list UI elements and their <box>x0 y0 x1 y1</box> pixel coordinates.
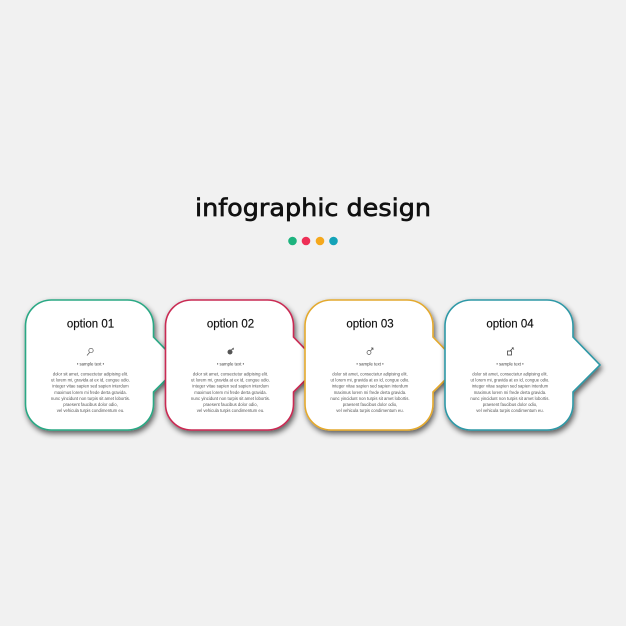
body text: maximus lorem mi frede derta gravida. <box>474 390 546 395</box>
heading: option 03 <box>346 318 394 330</box>
body text: integer vitae sapien sed sapien interdum <box>192 384 269 389</box>
panel: option 03 <box>305 300 460 430</box>
body text: maximus lorem mi frede derta gravida. <box>54 390 127 395</box>
body text <box>51 372 130 413</box>
body text: praesent faucibus dolor odio, <box>203 402 258 407</box>
panel: option 01 <box>26 300 180 430</box>
body text: integer vitae sapien sed sapien interdum <box>52 384 129 389</box>
body text: nunc yincidunt non turpis sit amet lobortis. <box>470 396 550 401</box>
body text: vel vehicula turpis condimentum eu. <box>476 408 544 413</box>
heading: option 01 <box>67 318 114 330</box>
body text: vel vehicula turpis condimentum eu. <box>336 408 404 413</box>
body text: praesent faucibus dolor odio, <box>483 402 537 407</box>
sample label: • sample text • <box>77 362 105 366</box>
body text: nunc yincidunt non turpis sit amet lobortis. <box>330 396 410 401</box>
body text: integer vitae sapien sed sapien interdum <box>332 384 409 389</box>
icon: ring <box>367 348 373 354</box>
body text: dolor sit amet, consectetur adipising elit. <box>332 372 408 376</box>
card shape <box>26 300 180 430</box>
body text: dolor sit amet, consectetur adipising elit. <box>53 372 128 376</box>
icon: pin <box>228 348 234 354</box>
card shape <box>166 300 320 430</box>
body text: praesent faucibus dolor odio, <box>63 402 118 407</box>
body text <box>191 372 270 413</box>
sample label: • sample text • <box>496 362 524 366</box>
panel: option 02 <box>166 300 320 430</box>
icon: magnifier <box>87 348 93 356</box>
card shape <box>445 300 600 430</box>
body text: vel vehicula turpis condimentum eu. <box>197 408 264 413</box>
body text <box>470 372 550 413</box>
heading: option 02 <box>207 318 254 330</box>
body text: vel vehicula turpis condimentum eu. <box>57 408 124 413</box>
sample label: • sample text • <box>356 362 384 366</box>
body text: integer vitae sapien sed sapien interdum <box>472 384 549 389</box>
title: infographic design <box>195 194 431 222</box>
heading: option 04 <box>486 318 534 330</box>
body text: ut lorem mi, gravida at ex id, congue odio. <box>331 378 409 383</box>
body text: ut lorem mi, gravida at ex id, congue odio. <box>191 378 270 383</box>
sample label: • sample text • <box>217 362 245 366</box>
body text: ut lorem mi, gravida at ex id, congue odio. <box>471 378 549 383</box>
body text: maximus lorem mi frede derta gravida. <box>334 390 406 395</box>
colored dots <box>288 237 338 245</box>
body text: dolor sit amet, consectetur adipising elit. <box>472 372 548 376</box>
body text: praesent faucibus dolor odio, <box>343 402 397 407</box>
body text: maximus lorem mi frede derta gravida. <box>194 390 267 395</box>
icon: tool <box>508 348 514 355</box>
body text <box>330 372 410 413</box>
body text: nunc yincidunt non turpis sit amet lobortis. <box>51 396 130 401</box>
panel: option 04 <box>445 300 600 430</box>
body text: nunc yincidunt non turpis sit amet lobortis. <box>191 396 270 401</box>
body text: ut lorem mi, gravida at ex id, congue odio. <box>51 378 130 383</box>
card shape <box>305 300 460 430</box>
body text: dolor sit amet, consectetur adipising elit. <box>193 372 268 376</box>
